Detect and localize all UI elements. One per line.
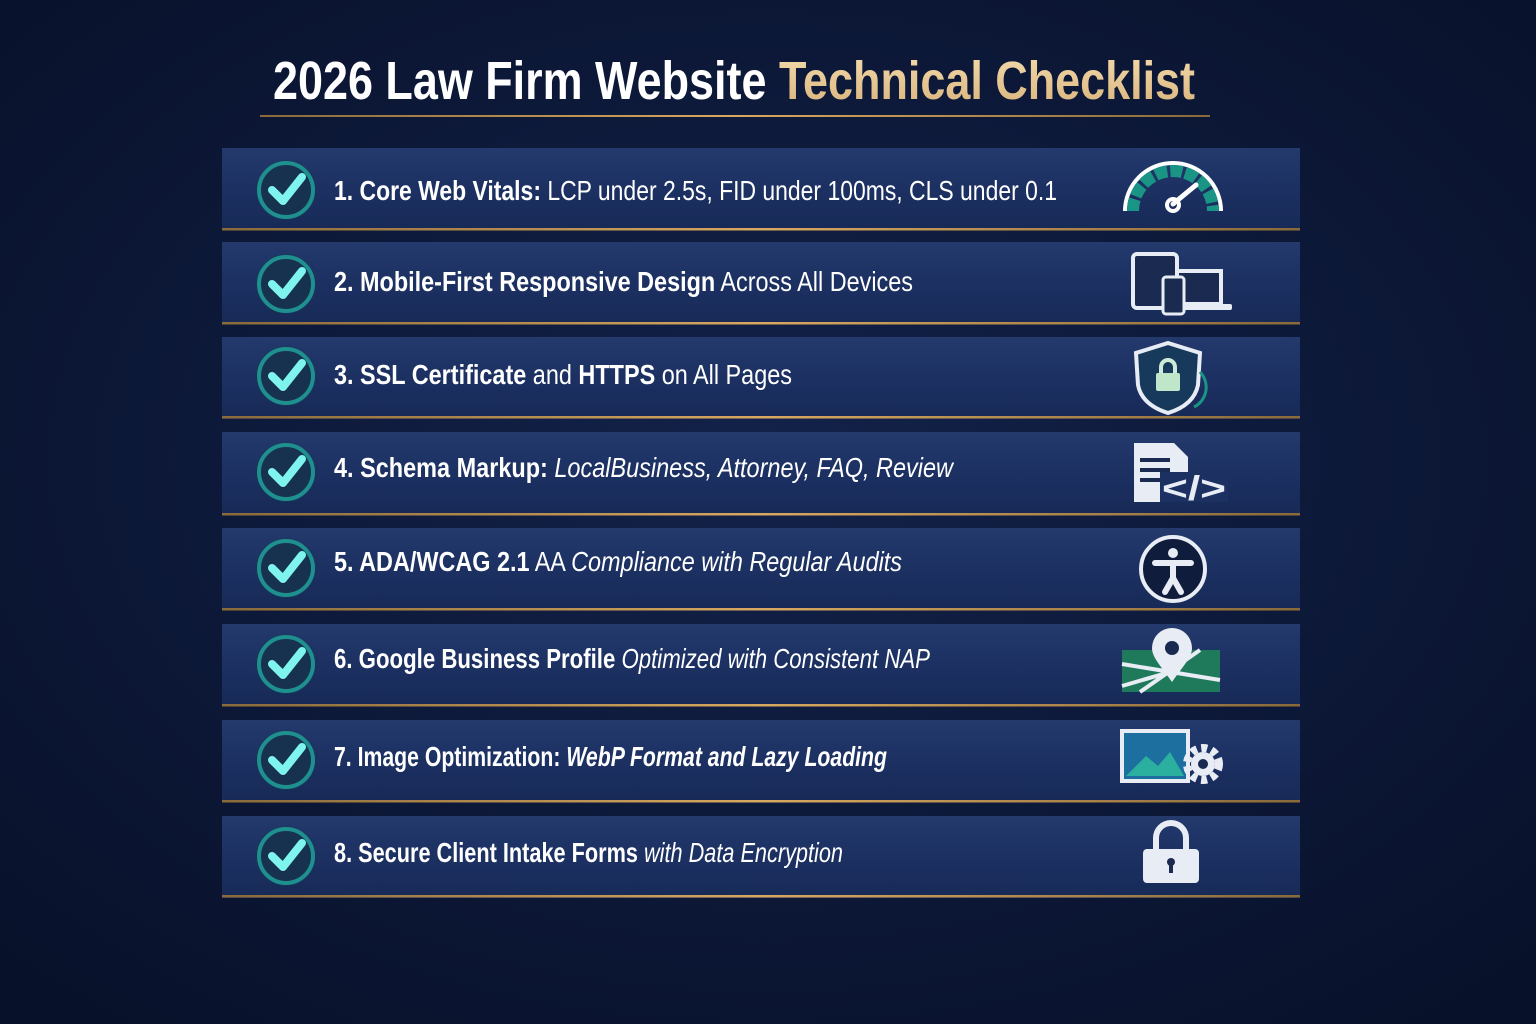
icon: code document bbox=[1134, 443, 1228, 508]
icon: check 6 bbox=[256, 634, 316, 694]
text 1: 1. Core Web Vitals: LCP under 2.5s, FID under 100ms, CLS under 0.1 bbox=[334, 175, 1057, 206]
text 7: 7. Image Optimization: WebP Format and Lazy Loading bbox=[334, 741, 887, 772]
icon: check 5 bbox=[256, 538, 316, 598]
icon: check 3 bbox=[256, 346, 316, 406]
title: 2026 Law Firm Website Technical Checklist bbox=[273, 51, 1195, 111]
icon: speedometer bbox=[1125, 163, 1221, 211]
icon: padlock bbox=[1143, 823, 1199, 883]
text 8: 8. Secure Client Intake Forms with Data Encryption bbox=[334, 837, 843, 868]
row 5 bbox=[222, 528, 1300, 610]
icon: code document: </> bbox=[1162, 470, 1226, 508]
icon: check 1 bbox=[256, 160, 316, 220]
text 5: 5. ADA/WCAG 2.1 AA Compliance with Regular Audits bbox=[334, 546, 902, 577]
icon: image gear bbox=[1122, 731, 1219, 781]
row 6 bbox=[222, 624, 1300, 706]
icon: check 4 bbox=[256, 442, 316, 502]
text 6: 6. Google Business Profile Optimized with Consistent NAP bbox=[334, 643, 930, 674]
row 3 bbox=[222, 337, 1300, 419]
icon: check 2 bbox=[256, 254, 316, 314]
icon: check 7 bbox=[256, 730, 316, 790]
row 1 bbox=[222, 148, 1300, 230]
row 7 bbox=[222, 720, 1300, 802]
text 4: 4. Schema Markup: LocalBusiness, Attorney, FAQ, Review bbox=[334, 452, 954, 483]
icon: check 8 bbox=[256, 826, 316, 886]
icon: devices bbox=[1133, 254, 1232, 314]
row 2 bbox=[222, 242, 1300, 324]
text 2: 2. Mobile-First Responsive Design Across All Devices bbox=[334, 266, 913, 297]
icon: shield lock bbox=[1136, 343, 1206, 413]
row 4 bbox=[222, 432, 1300, 516]
row 8 bbox=[222, 816, 1300, 898]
text 3: 3. SSL Certificate and HTTPS on All Pages bbox=[334, 359, 792, 390]
icon: accessibility bbox=[1141, 537, 1205, 601]
icon: map pin bbox=[1122, 628, 1220, 692]
